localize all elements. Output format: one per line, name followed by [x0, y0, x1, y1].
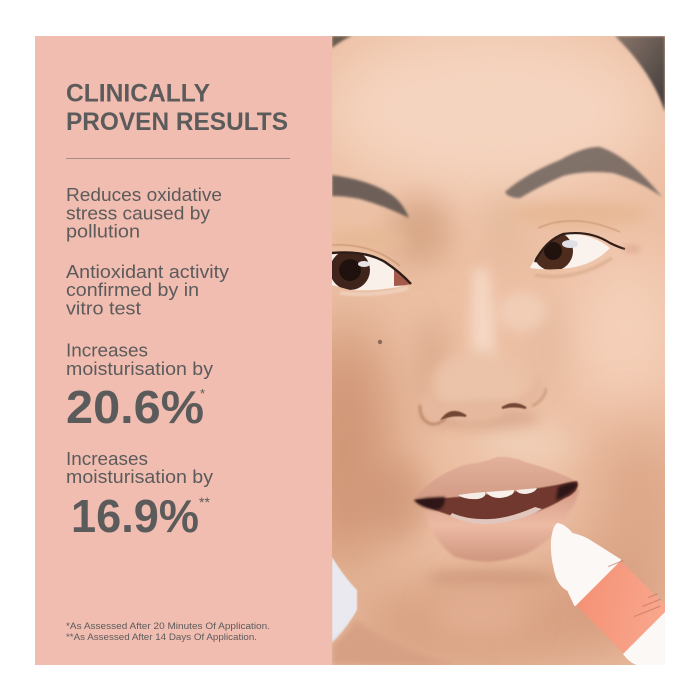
- heading: CLINICALLY: [66, 80, 210, 108]
- hair: [332, 36, 665, 112]
- text block: oxidative stress: stress caused by: [66, 204, 210, 224]
- stat: moisturisation 20.6%: Increases: [66, 340, 148, 360]
- beauty mark: [378, 340, 382, 344]
- stat: moisturisation 16.9%: **: [199, 494, 210, 510]
- stat: moisturisation 20.6%: *: [200, 386, 205, 401]
- photo: woman's face applying lip product: [332, 36, 665, 665]
- stat: moisturisation 20.6%: moisturisation by: [66, 359, 213, 379]
- neck shadow: [332, 622, 437, 665]
- heading: PROVEN RESULTS: [66, 108, 288, 136]
- footnotes: **As Assessed After 14 Days Of Application.: [66, 632, 257, 643]
- heading: [66, 80, 288, 136]
- left eye: [330, 245, 412, 294]
- text block: antioxidant activity: vitro test: [66, 298, 141, 318]
- stat: moisturisation 16.9%: moisturisation by: [66, 467, 213, 487]
- skin shading: [332, 36, 665, 665]
- footnotes: *As Assessed After 20 Minutes Of Application.: [66, 621, 270, 632]
- stat: moisturisation 20.6%: [66, 340, 213, 433]
- mouth interior: [414, 481, 578, 522]
- text block: oxidative stress: [66, 185, 222, 242]
- stat: moisturisation 16.9%: 16.9%: [71, 490, 199, 542]
- nose: [416, 268, 563, 430]
- panel: clinical results: [35, 36, 332, 665]
- teeth: [458, 492, 485, 499]
- text block: oxidative stress: pollution: [66, 222, 140, 242]
- left eyebrow: [332, 175, 409, 218]
- text block: antioxidant activity: confirmed by in: [66, 280, 199, 300]
- text block: antioxidant activity: [66, 262, 229, 318]
- lips: [414, 457, 579, 562]
- footnotes: [66, 621, 270, 643]
- right eye: [530, 221, 641, 277]
- right eyebrow: [505, 147, 662, 198]
- stat: moisturisation 16.9%: Increases: [66, 449, 148, 469]
- background corner: [332, 557, 357, 643]
- stat: moisturisation 16.9%: [66, 449, 213, 542]
- text block: oxidative stress: Reduces oxidative: [66, 185, 222, 205]
- product: lip tube: [552, 524, 672, 666]
- stat: moisturisation 20.6%: 20.6%: [66, 381, 204, 433]
- text block: antioxidant activity: Antioxidant activity: [66, 262, 229, 282]
